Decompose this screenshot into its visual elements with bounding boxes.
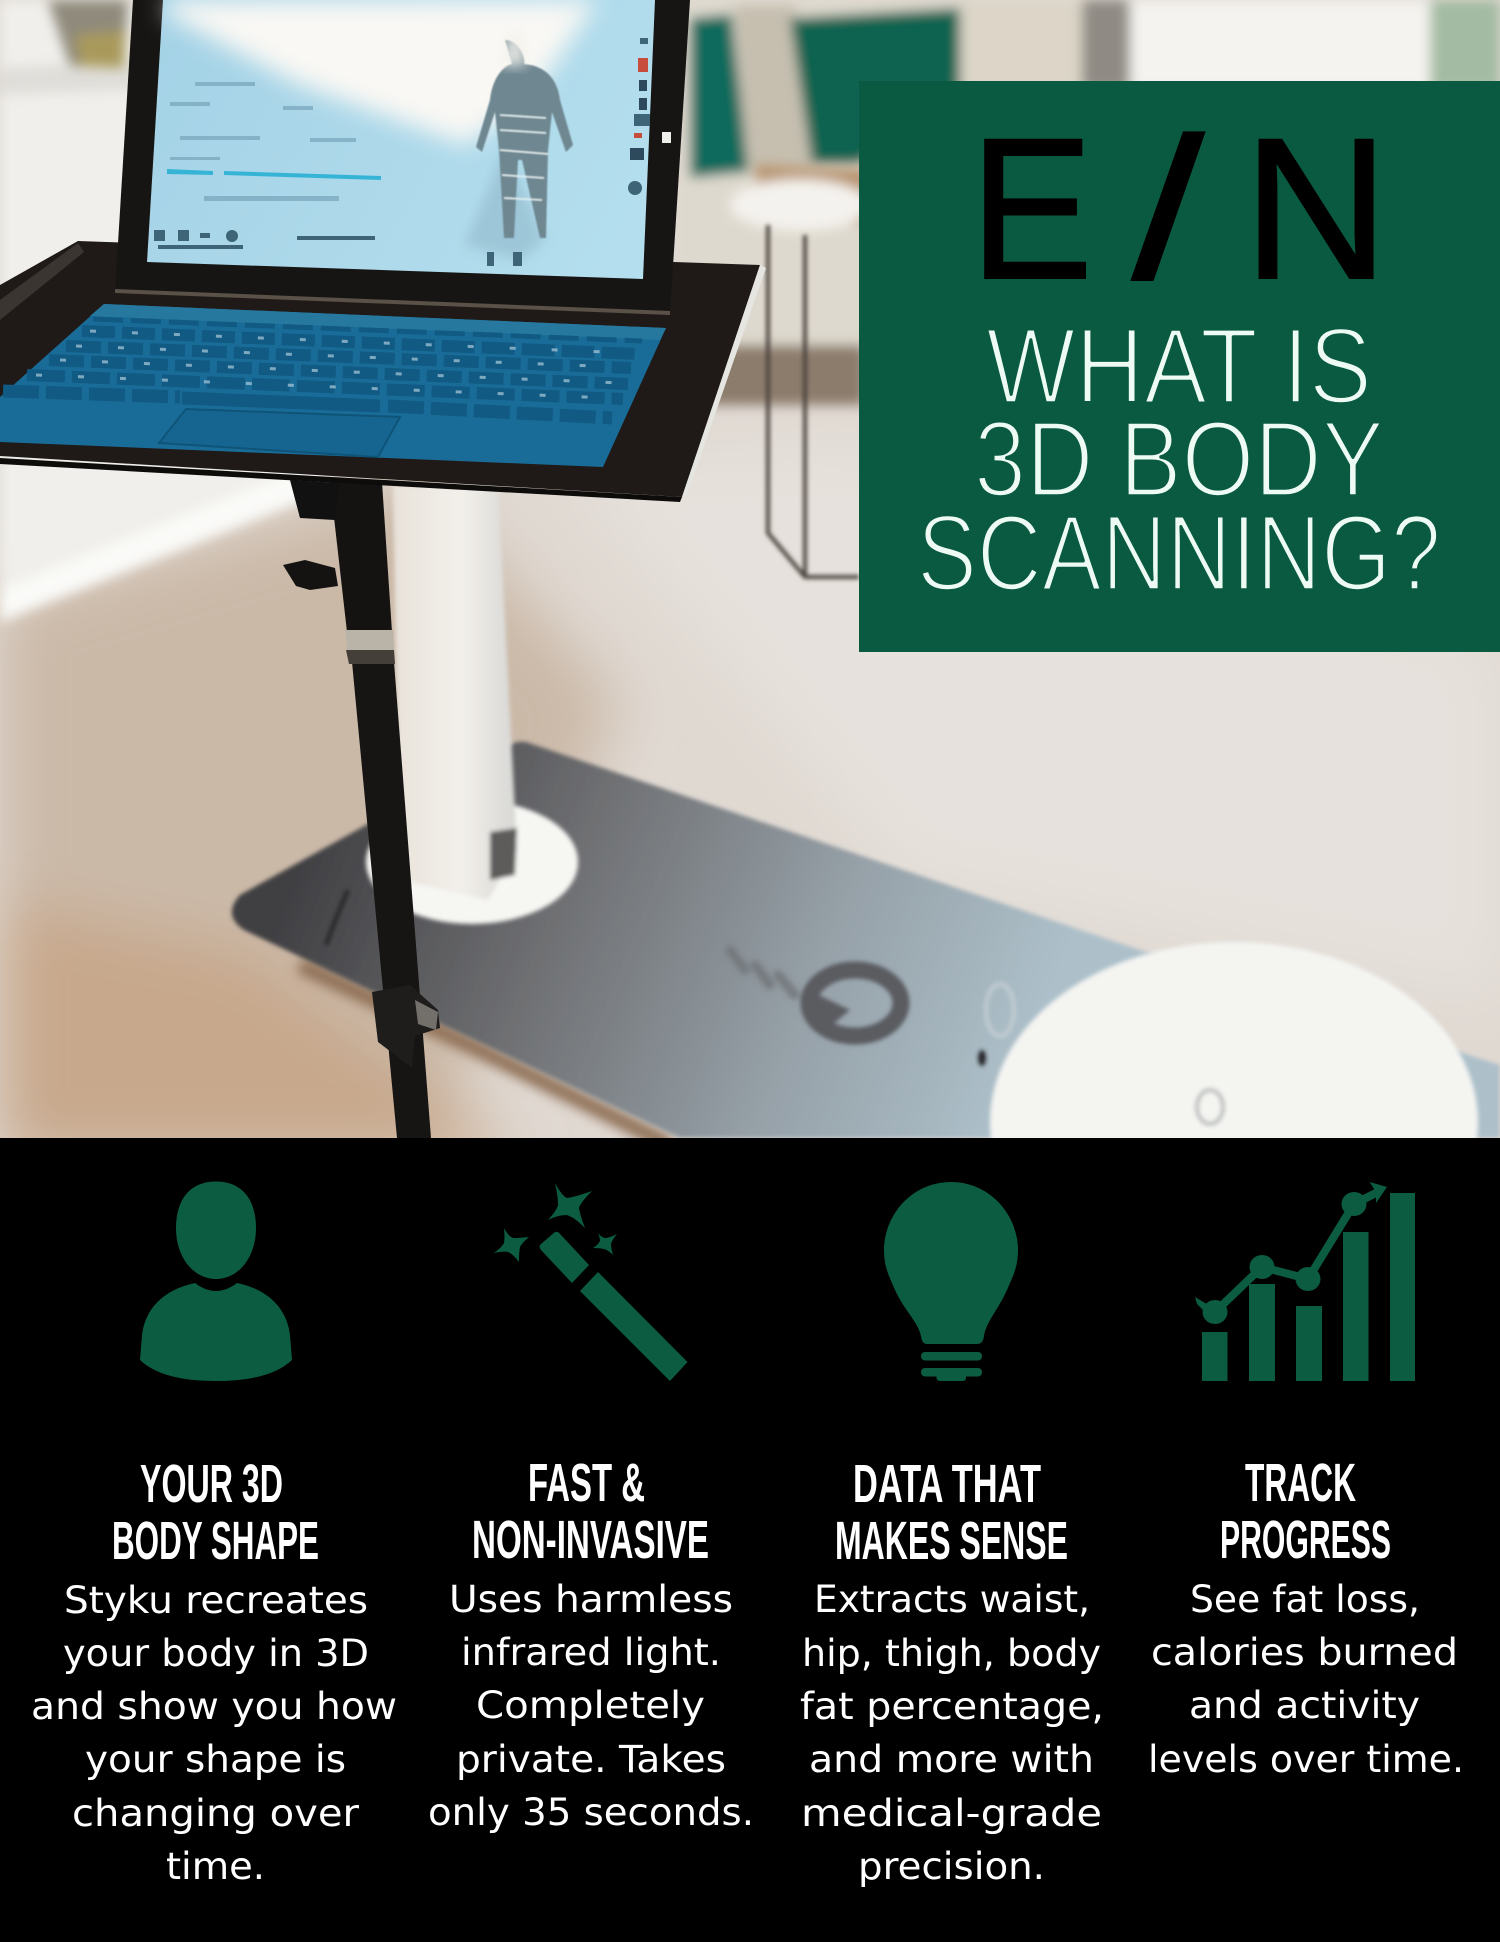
description: and show you how xyxy=(31,1685,397,1728)
tablet tray xyxy=(0,241,766,520)
app right toolbar icons xyxy=(628,38,671,195)
haze over screen xyxy=(168,0,598,145)
heading: FAST & xyxy=(528,1453,645,1513)
description: hip, thigh, body xyxy=(802,1632,1101,1675)
logo: E/N: N xyxy=(1243,96,1389,321)
pole collar xyxy=(345,630,395,664)
key legends as faint dashes xyxy=(36,331,630,398)
basket in the top-left corner xyxy=(48,0,128,68)
scanning mat xyxy=(232,742,1500,1138)
description xyxy=(31,1579,397,1888)
description: precision. xyxy=(858,1845,1045,1888)
description: See fat loss, xyxy=(1190,1578,1420,1621)
photo: 3D body scanner with tablet on stand xyxy=(0,0,1500,1302)
heading xyxy=(472,1453,709,1570)
description: changing over xyxy=(72,1792,360,1835)
description: and more with xyxy=(809,1738,1094,1781)
mounting pole xyxy=(283,482,440,1138)
body scan figure xyxy=(465,30,573,260)
keyboard cover xyxy=(0,304,666,467)
description: calories burned xyxy=(1151,1631,1458,1674)
icon: light bulb xyxy=(884,1182,1018,1381)
description: private. Takes xyxy=(456,1738,726,1781)
column 2: fast and non-invasive xyxy=(428,1453,754,1834)
description: Completely xyxy=(476,1684,705,1727)
description: infrared light. xyxy=(461,1631,721,1674)
icon: magic wand xyxy=(494,1183,688,1381)
column 4: track progress xyxy=(1148,1453,1464,1781)
description: your body in 3D xyxy=(63,1632,369,1675)
logo: E/N xyxy=(970,96,1389,321)
heading: YOUR 3D xyxy=(140,1454,283,1514)
description: and activity xyxy=(1189,1684,1420,1727)
description: only 35 seconds. xyxy=(428,1791,754,1834)
description: Extracts waist, xyxy=(814,1578,1090,1621)
description: Styku recreates xyxy=(64,1579,368,1622)
icon: growth chart with arrow xyxy=(1195,1182,1415,1381)
description xyxy=(800,1578,1104,1888)
heading xyxy=(112,1454,319,1571)
white sofa on the left xyxy=(0,0,330,622)
description: your shape is xyxy=(85,1738,346,1781)
heading: what is 3D body scanning xyxy=(917,305,1441,613)
white scanner disc xyxy=(978,942,1478,1302)
app labels as faint lines xyxy=(170,82,356,201)
description: medical-grade xyxy=(801,1792,1102,1835)
description: fat percentage, xyxy=(800,1685,1104,1728)
tablet body and screen xyxy=(115,0,690,315)
description xyxy=(1148,1578,1464,1781)
icon: person xyxy=(140,1182,292,1381)
app progress bars xyxy=(167,169,381,180)
heading: TRACK xyxy=(1245,1453,1356,1513)
logo: E/N: / xyxy=(1132,96,1204,321)
white scanner column xyxy=(366,485,578,924)
heading xyxy=(1220,1453,1391,1570)
heading: NON-INVASIVE xyxy=(472,1510,709,1570)
lower clamp xyxy=(372,985,440,1068)
bottom black band xyxy=(0,1138,1500,1942)
app bottom toolbar icons xyxy=(154,230,522,266)
heading: MAKES SENSE xyxy=(835,1511,1068,1571)
heading: DATA THAT xyxy=(853,1454,1041,1514)
heading: what is 3D body scanning: 3D BODY xyxy=(974,398,1384,519)
carpet shadow along the mat edge xyxy=(300,965,670,1145)
heading xyxy=(835,1454,1068,1571)
description xyxy=(428,1578,754,1834)
column 1: your 3D body shape xyxy=(31,1454,397,1888)
side knob xyxy=(283,560,338,590)
title panel xyxy=(859,81,1500,652)
column 3: data that makes sense xyxy=(800,1454,1104,1888)
heading: BODY SHAPE xyxy=(112,1511,319,1571)
description: time. xyxy=(166,1845,265,1888)
heading: what is 3D body scanning: WHAT IS xyxy=(986,305,1372,426)
Styku logo on the mat xyxy=(730,950,901,1036)
side table xyxy=(730,165,870,577)
description: levels over time. xyxy=(1148,1738,1464,1781)
cream sofa and pillows behind the panel xyxy=(680,0,1500,405)
logo: E/N: E xyxy=(970,96,1093,321)
floor carpet tones xyxy=(0,440,1500,1160)
description: Uses harmless xyxy=(449,1578,733,1621)
